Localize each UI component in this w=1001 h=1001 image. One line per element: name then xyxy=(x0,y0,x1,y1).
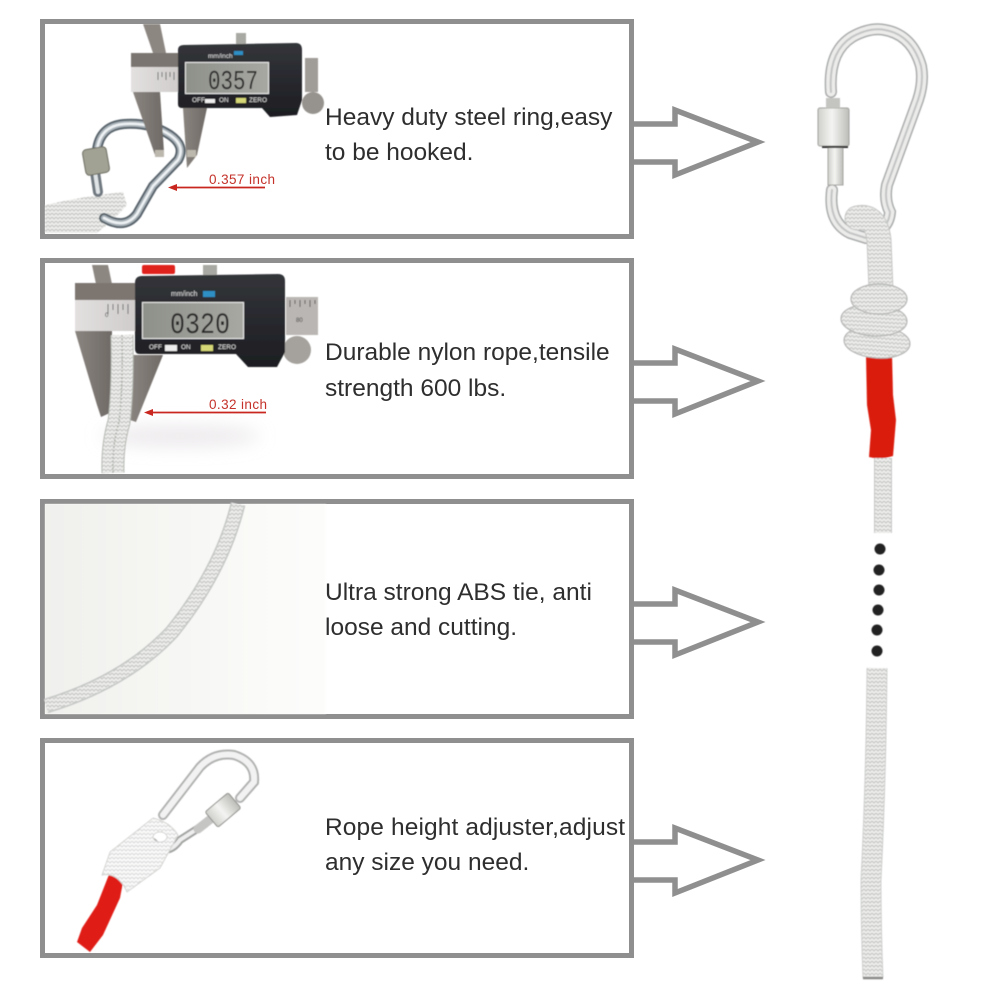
caption 1: Heavy duty steel ring,easy xyxy=(325,104,613,131)
product: carabiner and rope xyxy=(818,29,922,978)
panel frame 3 xyxy=(42,502,632,716)
locking collar xyxy=(818,98,849,185)
caliper: 0357 xyxy=(208,68,258,98)
panel frame 1 xyxy=(42,22,632,236)
photo: rope close-up xyxy=(45,504,326,714)
arrow 1 xyxy=(634,110,758,175)
rope knot xyxy=(840,284,911,360)
panel: ABS tie xyxy=(42,502,632,716)
caption 4: any size you need. xyxy=(325,849,529,876)
panel frame 4 xyxy=(42,740,632,956)
caliper: OFF xyxy=(192,97,205,104)
caption 3: Ultra strong ABS tie, anti xyxy=(325,579,592,606)
rope xyxy=(113,335,122,473)
shadow xyxy=(100,426,260,446)
measurement arrow 0.357 inch: 0.357 inch xyxy=(209,172,275,187)
panel: steel ring xyxy=(42,22,632,236)
carabiner xyxy=(82,124,181,223)
upper rope xyxy=(857,217,881,290)
caliper: 80 xyxy=(296,318,303,324)
photo: carabiner with knot xyxy=(77,754,254,952)
caption 2: Durable nylon rope,tensile xyxy=(325,339,610,366)
photo: caliper measuring rope xyxy=(75,265,318,473)
caliper: 0 xyxy=(105,313,109,319)
small carabiner xyxy=(153,754,254,850)
rope lower section xyxy=(863,668,883,978)
caliper: ZERO xyxy=(218,344,236,351)
caliper: ZERO xyxy=(249,97,267,104)
measurement arrow 0.32 inch: 0.32 inch xyxy=(209,397,267,412)
caption 4: Rope height adjuster,adjust xyxy=(325,814,625,841)
arrow 4 xyxy=(634,828,758,893)
caliper: mm/inch xyxy=(171,291,198,298)
dots: continuation xyxy=(872,544,886,656)
caliper xyxy=(131,24,324,168)
caliper: mm/inch xyxy=(208,53,233,60)
caption 2: strength 600 lbs. xyxy=(325,375,506,402)
panel frame 2 xyxy=(42,260,632,476)
photo background xyxy=(45,504,326,714)
caliper: OFF xyxy=(149,344,162,351)
measurement arrow 0.32 inch xyxy=(144,397,267,416)
panel: height adjuster xyxy=(42,740,632,956)
caption 3: loose and cutting. xyxy=(325,614,517,641)
caliper: ON xyxy=(219,97,229,104)
large carabiner xyxy=(831,29,922,238)
rope middle section xyxy=(874,458,892,533)
measurement arrow 0.357 inch xyxy=(168,172,275,191)
rope knot xyxy=(102,818,178,892)
caliper: 0320 xyxy=(170,309,230,343)
caliper: ON xyxy=(181,344,191,351)
rope end xyxy=(45,192,127,233)
red sleeve xyxy=(866,352,896,458)
arrow 2 xyxy=(634,349,758,414)
curved rope xyxy=(46,504,238,706)
red rope tip xyxy=(77,872,123,952)
panel: nylon rope xyxy=(42,260,632,476)
caliper xyxy=(75,265,318,422)
caption 1: to be hooked. xyxy=(325,139,473,166)
photo: caliper measuring ring xyxy=(45,24,324,233)
arrow 3 xyxy=(634,590,758,655)
